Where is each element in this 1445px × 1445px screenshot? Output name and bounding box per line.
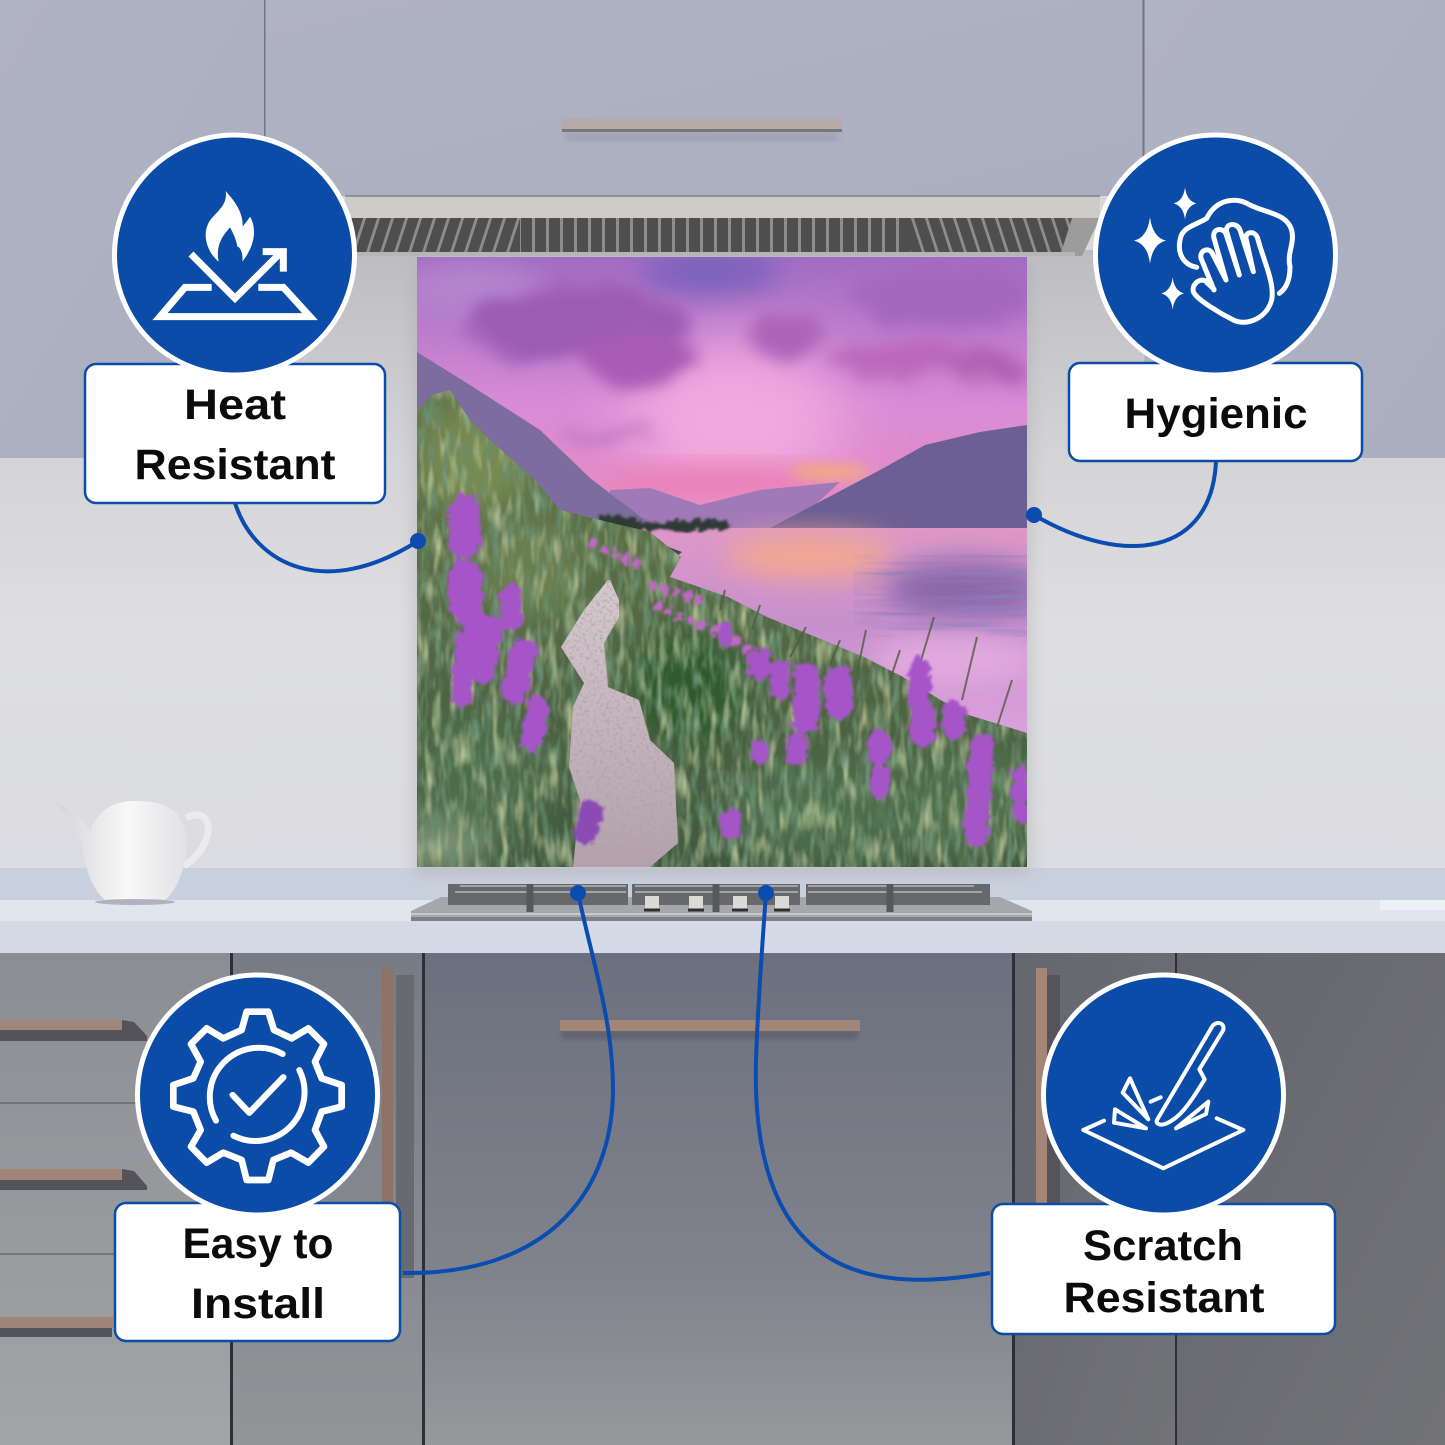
- countertop: [0, 868, 1445, 953]
- label box: heat resistant: [85, 364, 385, 503]
- footpath: [561, 580, 678, 867]
- kitchen wall: [0, 250, 1445, 875]
- connector: hygienic: [1026, 461, 1216, 546]
- reeds at the shore: [720, 590, 1012, 727]
- icon: knife scratching a surface: [1083, 1023, 1243, 1168]
- label box: scratch resistant: Resistant: [1064, 1274, 1264, 1322]
- water ripples: [870, 562, 1040, 630]
- top handle: [562, 119, 842, 140]
- badge: hygienic: [1096, 135, 1336, 375]
- label box: hygienic: Hygienic: [1124, 390, 1308, 438]
- badge: easy to install: [138, 975, 378, 1215]
- lower cabinets: [0, 953, 1445, 1445]
- badge: heat resistant: [114, 135, 354, 375]
- drawer handles: [0, 1020, 147, 1337]
- mountains: [417, 352, 1027, 530]
- sky: [417, 257, 1027, 505]
- icon: hand wiping with cloth and sparkles: [1134, 187, 1292, 322]
- meadow: [395, 380, 1035, 871]
- label box: heat resistant: Heat: [184, 381, 286, 429]
- lake: [640, 528, 1045, 743]
- door handles: [382, 968, 1060, 1278]
- label box: easy to install: Install: [191, 1280, 325, 1328]
- label box: scratch resistant: Scratch: [1083, 1222, 1243, 1270]
- label box: scratch resistant: [992, 1204, 1335, 1334]
- icon: flame over surface with deflected arrow: [160, 191, 310, 317]
- range hood: [345, 195, 1100, 256]
- label box: heat resistant: Resistant: [134, 441, 336, 489]
- badge: scratch resistant: [1044, 975, 1284, 1215]
- splashback picture: lake at sunset: [395, 250, 1045, 871]
- teapot: [55, 801, 208, 905]
- purple flowers: [462, 510, 1020, 835]
- pink shoreline flowers: [590, 542, 760, 660]
- connector: easy to install: [403, 885, 613, 1273]
- label box: easy to install: Easy to: [182, 1220, 334, 1268]
- connector: scratch resistant: [756, 885, 990, 1280]
- label box: easy to install: [115, 1203, 400, 1341]
- label box: hygienic: [1069, 363, 1362, 461]
- icon: gear with check mark: [173, 1012, 342, 1180]
- picture shadow: [414, 264, 1030, 874]
- far trees and rocks: [596, 514, 728, 560]
- stove hob: [411, 884, 1032, 921]
- connector: heat resistant: [235, 503, 426, 571]
- upper cabinets: [0, 0, 1445, 478]
